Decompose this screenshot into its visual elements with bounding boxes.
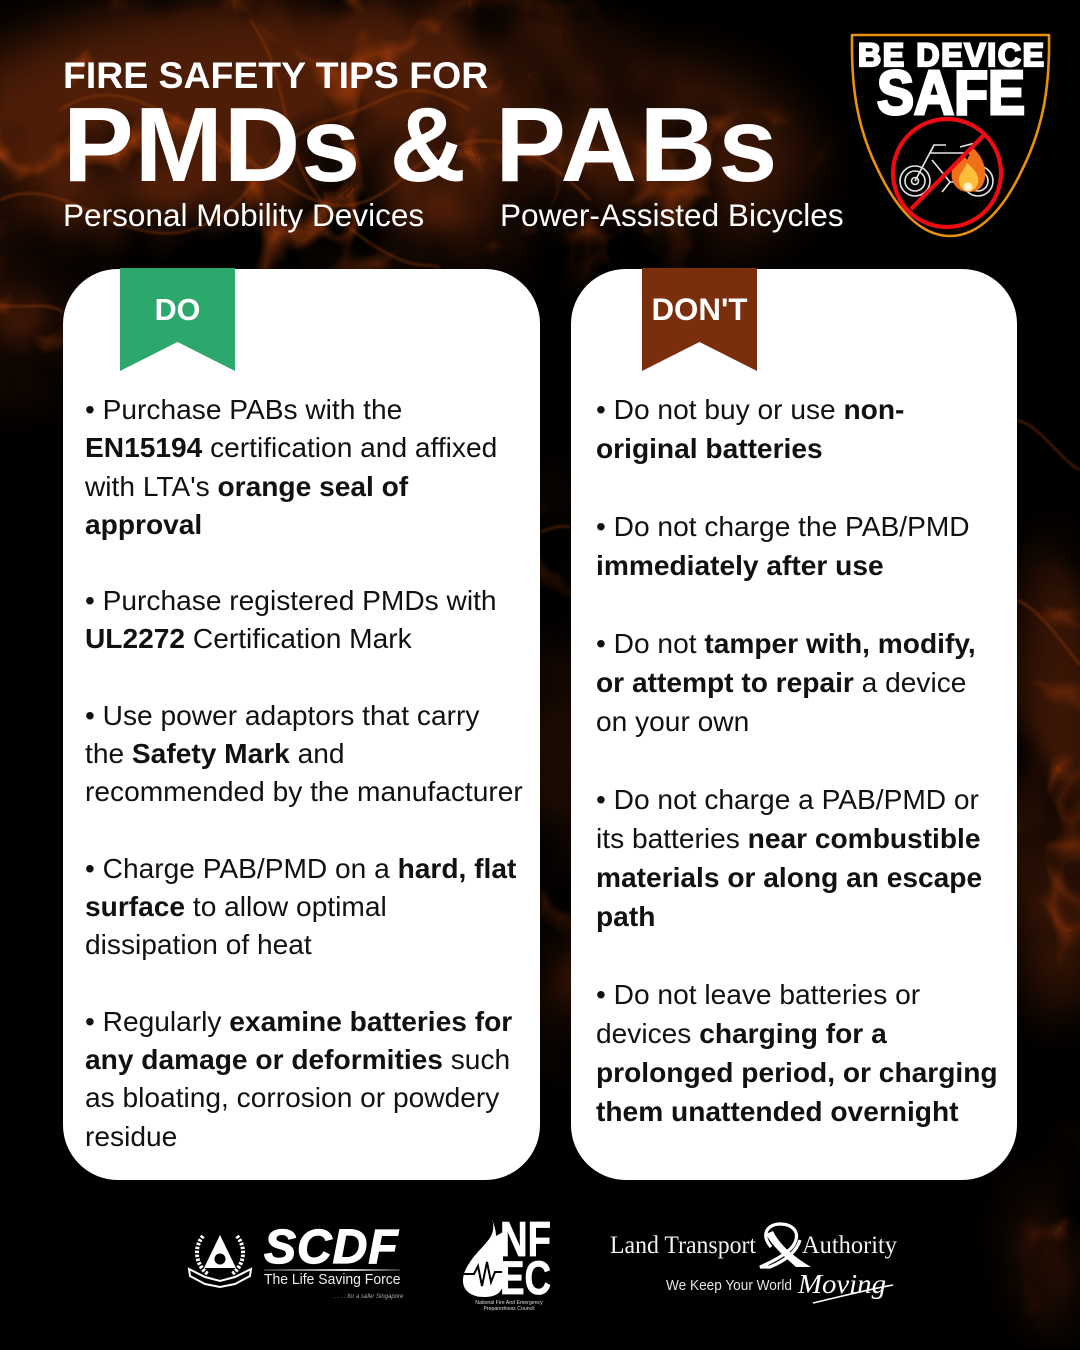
do tip 2: • Purchase registered PMDs with xyxy=(85,585,497,616)
do tip 3: the Safety Mark and xyxy=(85,738,345,769)
don't tip 2 xyxy=(596,511,970,581)
don't tip 5: prolonged period, or charging xyxy=(596,1057,998,1088)
don't tip 1: • Do not buy or use non- xyxy=(596,394,904,425)
do tip 1: with LTA's orange seal of xyxy=(85,471,408,502)
do tip 2: UL2272 Certification Mark xyxy=(85,623,412,654)
do tip 5: • Regularly examine batteries for xyxy=(85,1006,512,1037)
logo: nfec xyxy=(462,1213,551,1312)
don't tip 3 xyxy=(596,628,976,737)
title: PMDs & PABs: PMDs & PABs xyxy=(63,86,780,204)
don't tip 5: • Do not leave batteries or xyxy=(596,979,920,1010)
logo: land transport authority: Authority xyxy=(802,1232,897,1259)
icon: bicycle xyxy=(900,143,993,196)
don't tip 4 xyxy=(596,784,982,932)
don't tip 5: them unattended overnight xyxy=(596,1096,959,1127)
don't tip 3: • Do not tamper with, modify, xyxy=(596,628,976,659)
don't tip 3: on your own xyxy=(596,706,749,737)
ribbon: don't xyxy=(642,268,757,371)
do tip 3: recommended by the manufacturer xyxy=(85,776,523,807)
don't tip 1 xyxy=(596,394,904,464)
do tip 1: • Purchase PABs with the xyxy=(85,394,402,425)
don't tip 5: devices charging for a xyxy=(596,1018,887,1049)
badge: be device safe shield: BE DEVICE xyxy=(858,37,1044,73)
don't tip 2: • Do not charge the PAB/PMD xyxy=(596,511,970,542)
logo: land transport authority xyxy=(610,1222,897,1304)
logo: scdf wordmark xyxy=(264,1221,404,1300)
don't tip 3: or attempt to repair a device xyxy=(596,667,966,698)
do tip 1: approval xyxy=(85,509,202,540)
don't tip 4: • Do not charge a PAB/PMD or xyxy=(596,784,979,815)
don't tip 5 xyxy=(596,979,998,1127)
do tip 5: residue xyxy=(85,1121,177,1152)
icon: flame xyxy=(952,146,985,192)
do tip 3: • Use power adaptors that carry xyxy=(85,700,479,731)
badge: be device safe shield xyxy=(850,34,1050,238)
icon: prohibition sign xyxy=(893,119,1001,227)
subtitle: fire safety tips for: FIRE SAFETY TIPS FOR xyxy=(63,54,488,96)
do tip 4: • Charge PAB/PMD on a hard, flat xyxy=(85,853,516,884)
don't tip 2: immediately after use xyxy=(596,550,884,581)
do tip 2 xyxy=(85,585,497,654)
logo: scdf crest xyxy=(188,1234,252,1288)
ribbon: do xyxy=(120,268,235,371)
do tip 1: EN15194 certification and affixed xyxy=(85,432,497,463)
logo: scdf wordmark: SCDF xyxy=(264,1221,399,1274)
don't tip 4: its batteries near combustible xyxy=(596,823,981,854)
logo: land transport authority: We Keep Your World xyxy=(666,1277,792,1294)
logo: scdf wordmark: . . . . for a safer Singapore xyxy=(334,1294,403,1300)
do tip 5 xyxy=(85,1006,512,1152)
do tip 4 xyxy=(85,853,516,960)
don't tip 4: path xyxy=(596,901,655,932)
badge: be device safe shield: SAFE xyxy=(877,59,1025,128)
do tip 3 xyxy=(85,700,523,807)
panel: don't xyxy=(571,269,1017,1180)
panel: do xyxy=(63,269,540,1180)
ribbon: do: DO xyxy=(155,293,200,327)
logo: nfec: Preparedness Council xyxy=(483,1306,535,1312)
do tip 1 xyxy=(85,394,497,540)
ribbon: don't: DON'T xyxy=(651,292,748,327)
do tip 4: surface to allow optimal xyxy=(85,891,387,922)
don't tip 1: original batteries xyxy=(596,433,823,464)
logo: nfec: National Fire And Emergency xyxy=(475,1300,543,1306)
don't tip 4: materials or along an escape xyxy=(596,862,982,893)
label: Power-Assisted Bicycles: Power-Assisted Bicycles xyxy=(500,197,844,233)
label: Personal Mobility Devices: Personal Mobility Devices xyxy=(63,197,424,233)
do tips list xyxy=(85,394,523,1152)
do tip 5: any damage or deformities such xyxy=(85,1044,510,1075)
logo: land transport authority: Land Transport xyxy=(610,1232,756,1259)
do tip 5: as bloating, corrosion or powdery xyxy=(85,1082,499,1113)
logo: scdf wordmark: The Life Saving Force xyxy=(264,1271,400,1288)
do tip 4: dissipation of heat xyxy=(85,929,312,960)
logo: land transport authority: Moving xyxy=(797,1269,886,1299)
